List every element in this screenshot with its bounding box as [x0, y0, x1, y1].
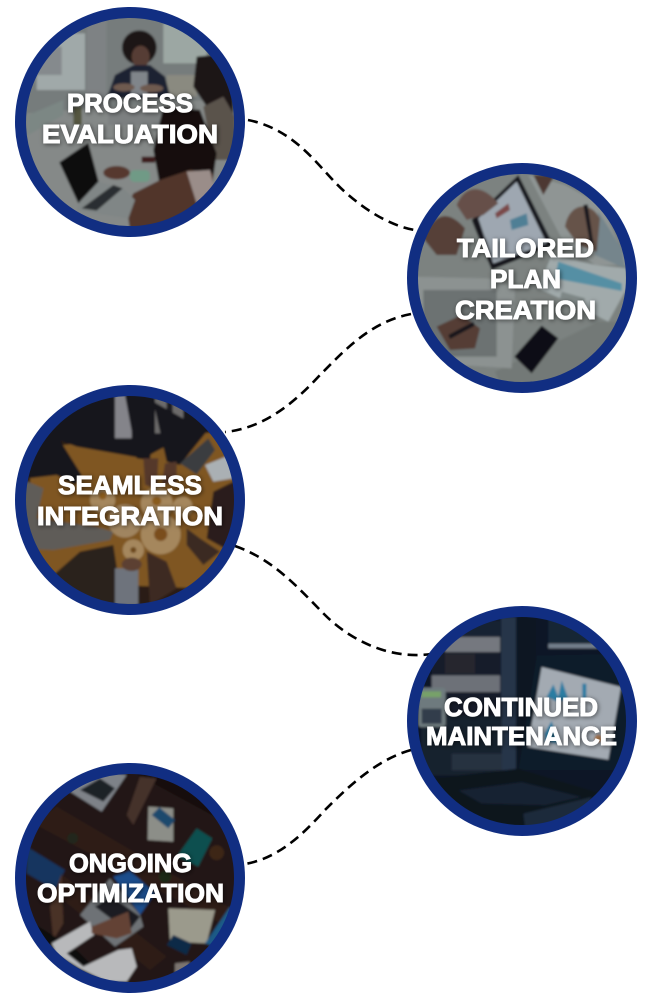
- photo: hands holding gears: [26, 396, 234, 604]
- photo: meeting around a table: [26, 18, 234, 226]
- photo: server rack and monitor: [418, 617, 626, 825]
- photo: overhead view of desk: [26, 774, 234, 982]
- step 3: seamless integration: [13, 382, 247, 615]
- label: process evaluation: PROCESS: [67, 88, 193, 118]
- label: seamless integration: INTEGRATION: [37, 501, 223, 531]
- connector: process evaluation to tailored plan: [248, 120, 421, 231]
- label: ongoing optimization: OPTIMIZATION: [37, 878, 224, 908]
- label: process evaluation: EVALUATION: [42, 119, 218, 149]
- ring: [412, 168, 632, 388]
- label: tailored plan creation: PLAN: [490, 264, 561, 294]
- step 1: process evaluation: [13, 7, 253, 240]
- label: tailored plan creation: [455, 233, 596, 325]
- label: continued maintenance: MAINTENANCE: [426, 721, 617, 751]
- label: seamless integration: SEAMLESS: [58, 470, 202, 500]
- connector: seamless integration to continued maintenance: [235, 546, 431, 655]
- ring: [20, 12, 240, 232]
- label: ongoing optimization: ONGOING: [69, 848, 192, 878]
- label: tailored plan creation: TAILORED: [457, 233, 594, 263]
- connector: tailored plan to seamless integration: [225, 314, 411, 432]
- step 4: continued maintenance: [405, 604, 638, 837]
- label: continued maintenance: [426, 692, 617, 751]
- label: continued maintenance: CONTINUED: [444, 692, 598, 722]
- label: ongoing optimization: [37, 848, 224, 908]
- photo: documents and tablet: [418, 174, 626, 382]
- connector: continued maintenance to ongoing optimization: [245, 750, 411, 864]
- label: process evaluation: [42, 88, 218, 149]
- step 5: ongoing optimization: [13, 760, 247, 993]
- ring: [20, 768, 240, 988]
- step 2: tailored plan creation: [405, 162, 638, 395]
- label: seamless integration: [37, 470, 223, 531]
- ring: [20, 390, 240, 610]
- label: tailored plan creation: CREATION: [455, 295, 596, 325]
- ring: [412, 612, 632, 830]
